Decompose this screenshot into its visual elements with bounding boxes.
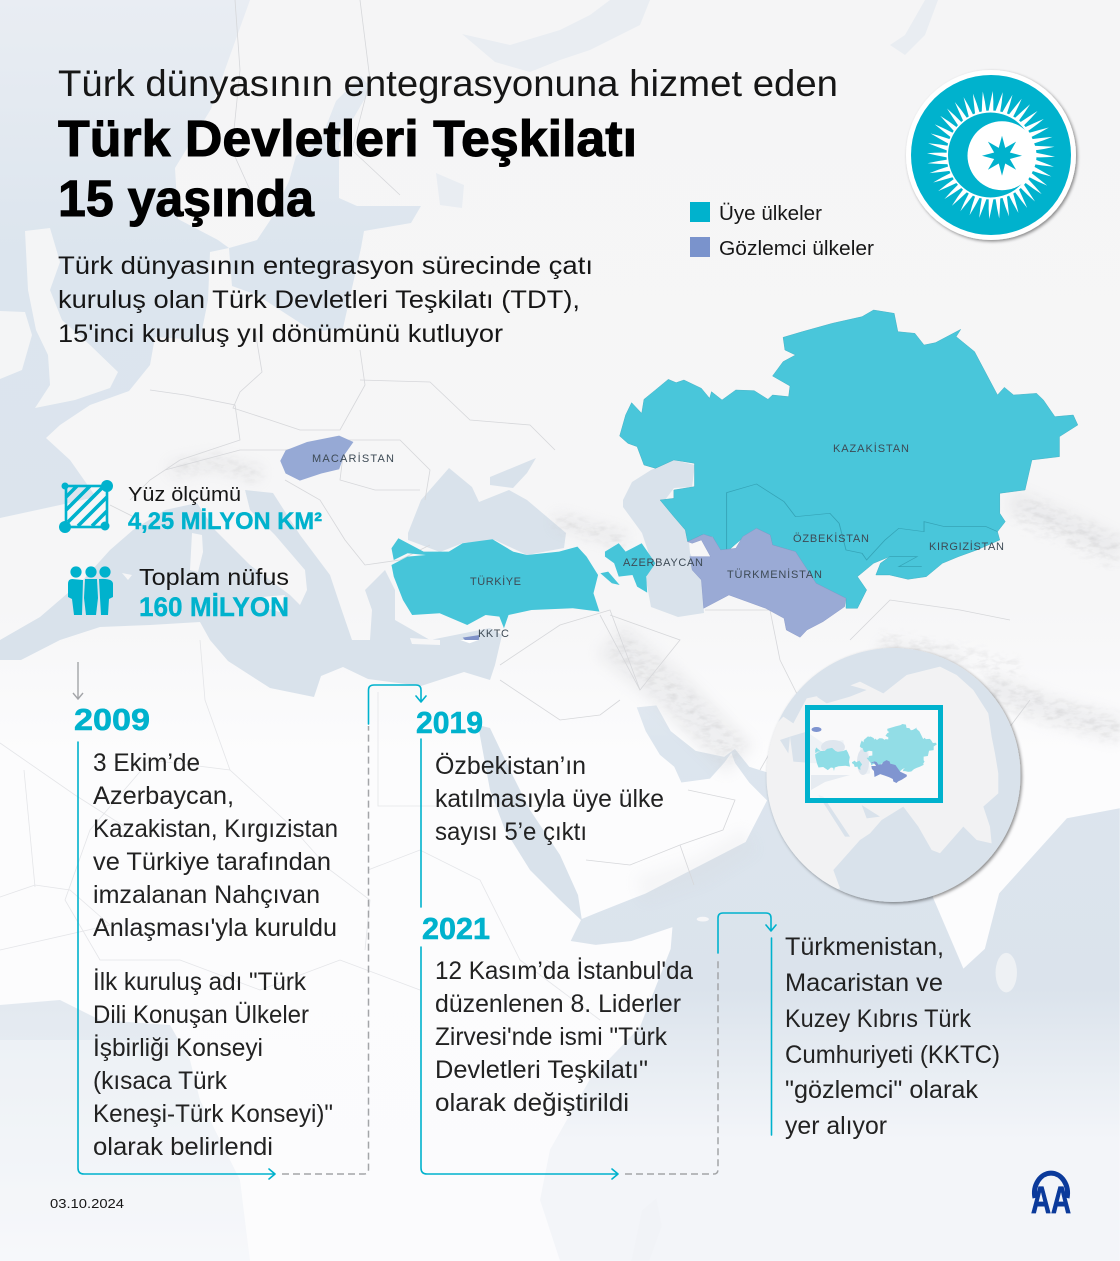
year: 2021: 2021 [422,911,490,946]
sea: Baltic [229,76,421,332]
label: Türkiye: TÜRKİYE [470,575,521,588]
text: observers [785,933,1000,1140]
country: Hungary [280,436,353,481]
icon: hatched square [59,480,113,533]
label: KKTC: KKTC [478,628,509,640]
text: 2019 [435,752,664,846]
islands [122,533,440,645]
globe inset frame [808,708,940,800]
terrain shading [170,462,1120,890]
text: 2021: düzenlenen 8. Liderler [435,990,681,1018]
text: observers: Türkmenistan, [785,933,944,961]
year: 2019: 2019 [416,705,483,740]
title: line 2: Türk Devletleri Teşkilatı [58,110,637,167]
map: member and observer countries [280,310,1078,643]
legend [690,202,874,260]
text: 2021: olarak değiştirildi [435,1089,629,1117]
text: 2021: Zirvesi'nde ismi "Türk [435,1023,667,1051]
country: Kazakhstan, Uzbekistan, Kyrgyzstan [620,310,1078,608]
sea: Persian Gulf and Indian Ocean [540,705,1120,1261]
text: 2019: sayısı 5’e çıktı [435,818,587,846]
label: Kazakistan: KAZAKİSTAN [833,442,909,455]
title: line 3: 15 yaşında [58,170,315,227]
stat: area [59,480,322,535]
timeline: 2019 [416,705,664,907]
text: 2009 founding: imzalanan Nahçıvan [93,881,320,909]
icon: Anadolu Agency logo [1031,1173,1071,1222]
stat value: 4,25 MİLYON KM² [128,508,322,535]
label: Kırgızistan: KIRGIZİSTAN [929,540,1004,553]
text: 2021: 12 Kasım’da İstanbul'da [435,956,693,985]
label: Türkmenistan: TÜRKMENİSTAN [727,568,822,581]
title [58,63,838,227]
stat: population [68,564,289,622]
sea: Gulf of Guinea [0,1000,250,1261]
line: 2019 [420,739,422,907]
timeline: 2009 [74,702,338,1179]
text: 2009 first name [93,967,333,1161]
intro text: Türk dünyasının entegrasyon sürecinde çatı [58,252,593,280]
line: observers [770,938,772,1135]
text: 2009 founding: Kazakistan, Kırgızistan [93,815,338,843]
text: 2021 [435,956,693,1117]
text: 2021: Devletleri Teşkilatı" [435,1056,648,1084]
title: line 1: Türk dünyasının entegrasyonuna hizmet eden [58,63,838,104]
text: observers: Macaristan ve [785,969,943,997]
timeline: observers [772,933,1000,1140]
arrow: 2009 connector [78,742,275,1179]
text: observers: Kuzey Kıbrıs Türk [785,1005,971,1033]
intro text: kuruluş olan Türk Devletleri Teşkilatı (TDT), [58,286,580,314]
mountain texture [170,462,1120,755]
text: observers: "gözlemci" olarak [785,1076,978,1104]
land: British Isles [0,228,118,408]
sea: Black Sea and Azov [408,468,566,555]
text: 2009 founding: Azerbaycan, [93,782,234,810]
year: 2009: 2009 [74,702,150,737]
text: 2009 first name: İlk kuruluş adı "Türk [93,967,306,996]
text: 2009 first name: İşbirliği Konseyi [93,1033,263,1062]
text: 2009 first name: (kısaca Türk [93,1067,227,1095]
text: 2019: katılmasıyla üye ülke [435,785,664,813]
stat label: Yüz ölçümü [128,484,241,506]
sea: Mediterranean [0,490,502,697]
country borders [0,0,1030,1020]
sea: Caspian [623,460,704,617]
icon: organization emblem [906,70,1076,240]
country: KKTC [460,635,480,643]
stat value: 160 MİLYON [139,592,289,622]
map labels [312,442,1004,640]
text: 2009 first name: Keneşi-Türk Konseyi)" [93,1100,333,1128]
arrow: timeline start [73,662,83,699]
text: 2019: Özbekistan’ın [435,752,586,780]
label: Özbekistan: ÖZBEKİSTAN [793,532,869,545]
icon: three people [68,566,113,615]
text: observers: yer alıyor [785,1112,887,1140]
text: 2009 founding: Anlaşması'yla kuruldu [93,914,337,942]
sea: White Sea and northern gulfs [436,0,938,208]
timeline: 2021 [421,911,693,1179]
arrow: 2021 connector [421,947,618,1179]
icon: Anadolu Agency logo: AA [1031,1180,1071,1222]
text: 2009 founding [93,749,338,942]
country: Turkmenistan [688,528,846,637]
text: 2009 founding: 3 Ekim’de [93,749,200,777]
label: Azerbaycan: AZERBAYCAN [623,557,703,569]
legend: member countries: Üye ülkeler [719,203,822,225]
text: observers: Cumhuriyeti (KKTC) [785,1041,1000,1069]
arrow: 2009 to 2019 connector [282,685,426,1174]
legend: observer countries: Gözlemci ülkeler [719,238,874,260]
text: 2009 founding: ve Türkiye tarafından [93,848,331,876]
intro text: 15'inci kuruluş yıl dönümünü kutluyor [58,320,503,348]
arrow: 2021 to observers connector [625,913,776,1174]
stat label: Toplam nüfus [139,564,289,590]
sea: Red Sea [478,725,582,921]
sea: Atlantic and North Sea [0,0,250,518]
label: Macaristan: MACARİSTAN [312,452,394,465]
text: 2009 first name: olarak belirlendi [93,1133,273,1161]
text: 2009 first name: Dili Konuşan Ülkeler [93,1001,309,1029]
date: 03.10.2024 [50,1196,124,1211]
country: Türkiye [391,538,599,628]
globe locator [750,648,1020,902]
intro text [58,252,593,348]
country: Azerbaijan [600,543,655,593]
